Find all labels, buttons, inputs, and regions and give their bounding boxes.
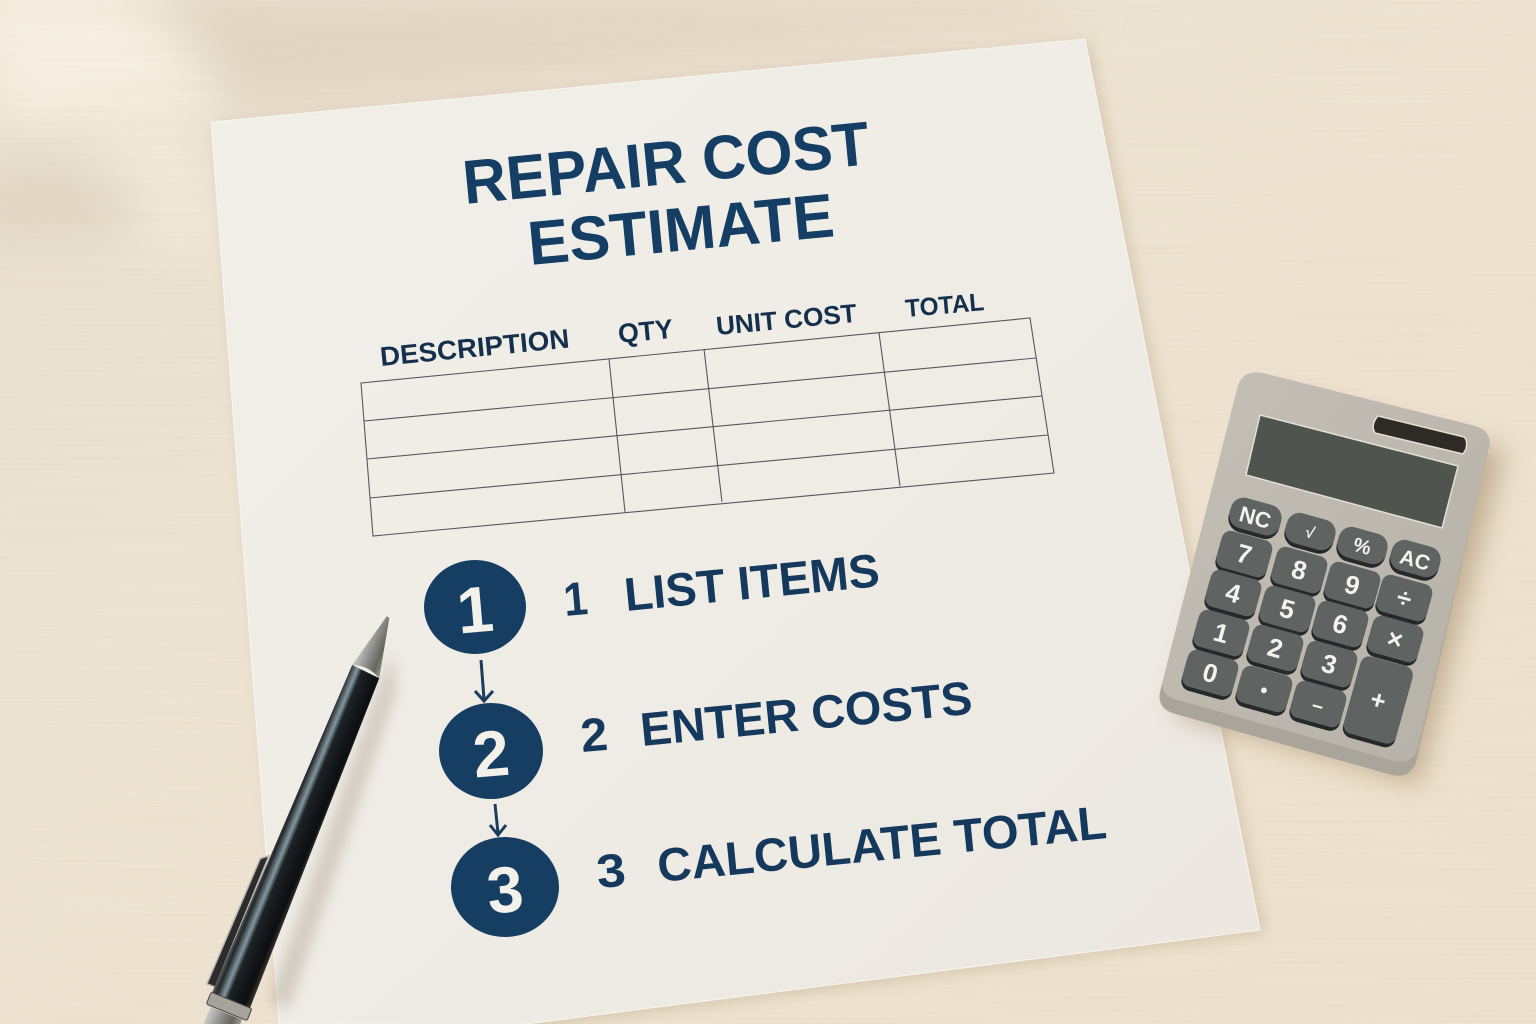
key divide: ÷: [1393, 582, 1415, 614]
key multiply: ×: [1384, 623, 1407, 656]
key 6: [1309, 599, 1370, 653]
step 2: ENTER COSTS: [638, 671, 974, 756]
table headers: TOTAL: [904, 288, 985, 323]
pen grip: [192, 1007, 242, 1024]
key 0: [1179, 648, 1240, 702]
key 8: 8: [1288, 554, 1310, 586]
table headers: QTY: [617, 314, 674, 349]
key NC: [1225, 495, 1285, 542]
key minus: –: [1309, 694, 1326, 718]
key 2: 2: [1264, 632, 1286, 664]
key 7: [1213, 529, 1274, 583]
key AC: [1386, 537, 1444, 584]
key percent: %: [1350, 534, 1374, 560]
step 3: [451, 795, 1109, 937]
title: ESTIMATE: [525, 181, 837, 279]
key 5: 5: [1276, 593, 1298, 625]
table headers: UNIT COST: [715, 298, 858, 341]
arrow 2 to 3: [490, 804, 506, 835]
key percent: [1333, 524, 1391, 571]
solar panel: [1373, 416, 1467, 454]
key plus: +: [1367, 684, 1390, 717]
title: [460, 109, 873, 279]
key 9: 9: [1341, 569, 1363, 601]
calculator: [1160, 373, 1489, 776]
step 1: [424, 543, 882, 654]
step 2: 2: [470, 716, 512, 792]
paper shadow: [215, 42, 1265, 1024]
key multiply: [1364, 614, 1425, 668]
key 4: [1202, 568, 1263, 622]
key divide: [1373, 573, 1434, 627]
key 3: [1298, 639, 1359, 693]
display: [1246, 415, 1458, 528]
step 3: 3: [594, 843, 628, 898]
key 5: [1256, 584, 1317, 638]
step 1: 1: [561, 571, 590, 626]
table grid: [361, 318, 1054, 536]
key NC: NC: [1236, 501, 1274, 534]
arrow 1 to 2: [475, 660, 493, 701]
key 4: 4: [1222, 577, 1245, 610]
estimate sheet: [211, 39, 1260, 1024]
calculator shadow: [1175, 392, 1505, 785]
key 3: 3: [1318, 648, 1340, 680]
calculator face: [1162, 373, 1489, 762]
pen: [181, 606, 408, 1024]
table headers: DESCRIPTION: [379, 324, 571, 372]
key 1: [1190, 608, 1251, 662]
pen collar: [206, 992, 252, 1021]
table headers: [379, 288, 985, 372]
step 3: 3: [484, 852, 526, 928]
key minus: [1287, 679, 1348, 733]
step 1: LIST ITEMS: [622, 543, 882, 621]
key AC: AC: [1397, 545, 1433, 576]
key root: [1281, 510, 1339, 557]
key 6: 6: [1329, 608, 1351, 640]
key 1: 1: [1210, 617, 1232, 649]
key 9: [1321, 560, 1382, 614]
key decimal: [1233, 664, 1294, 718]
pen clip: [207, 852, 269, 987]
key 7: 7: [1233, 538, 1255, 570]
key root: √: [1303, 524, 1317, 543]
pen shadow: [270, 650, 396, 1010]
pen tip cone: [351, 611, 402, 678]
step 2: 2: [578, 707, 610, 762]
key 0: 0: [1199, 657, 1221, 689]
key 8: [1268, 545, 1329, 599]
calculator base edge: [1160, 373, 1489, 776]
key 2: [1244, 623, 1305, 677]
key decimal: •: [1257, 679, 1270, 703]
key plus: [1340, 654, 1415, 750]
title: REPAIR COST: [460, 109, 873, 218]
step 1: 1: [454, 572, 496, 648]
step 3: CALCULATE TOTAL: [655, 795, 1109, 892]
pen barrel: [212, 663, 385, 1008]
step 2: [439, 671, 974, 799]
